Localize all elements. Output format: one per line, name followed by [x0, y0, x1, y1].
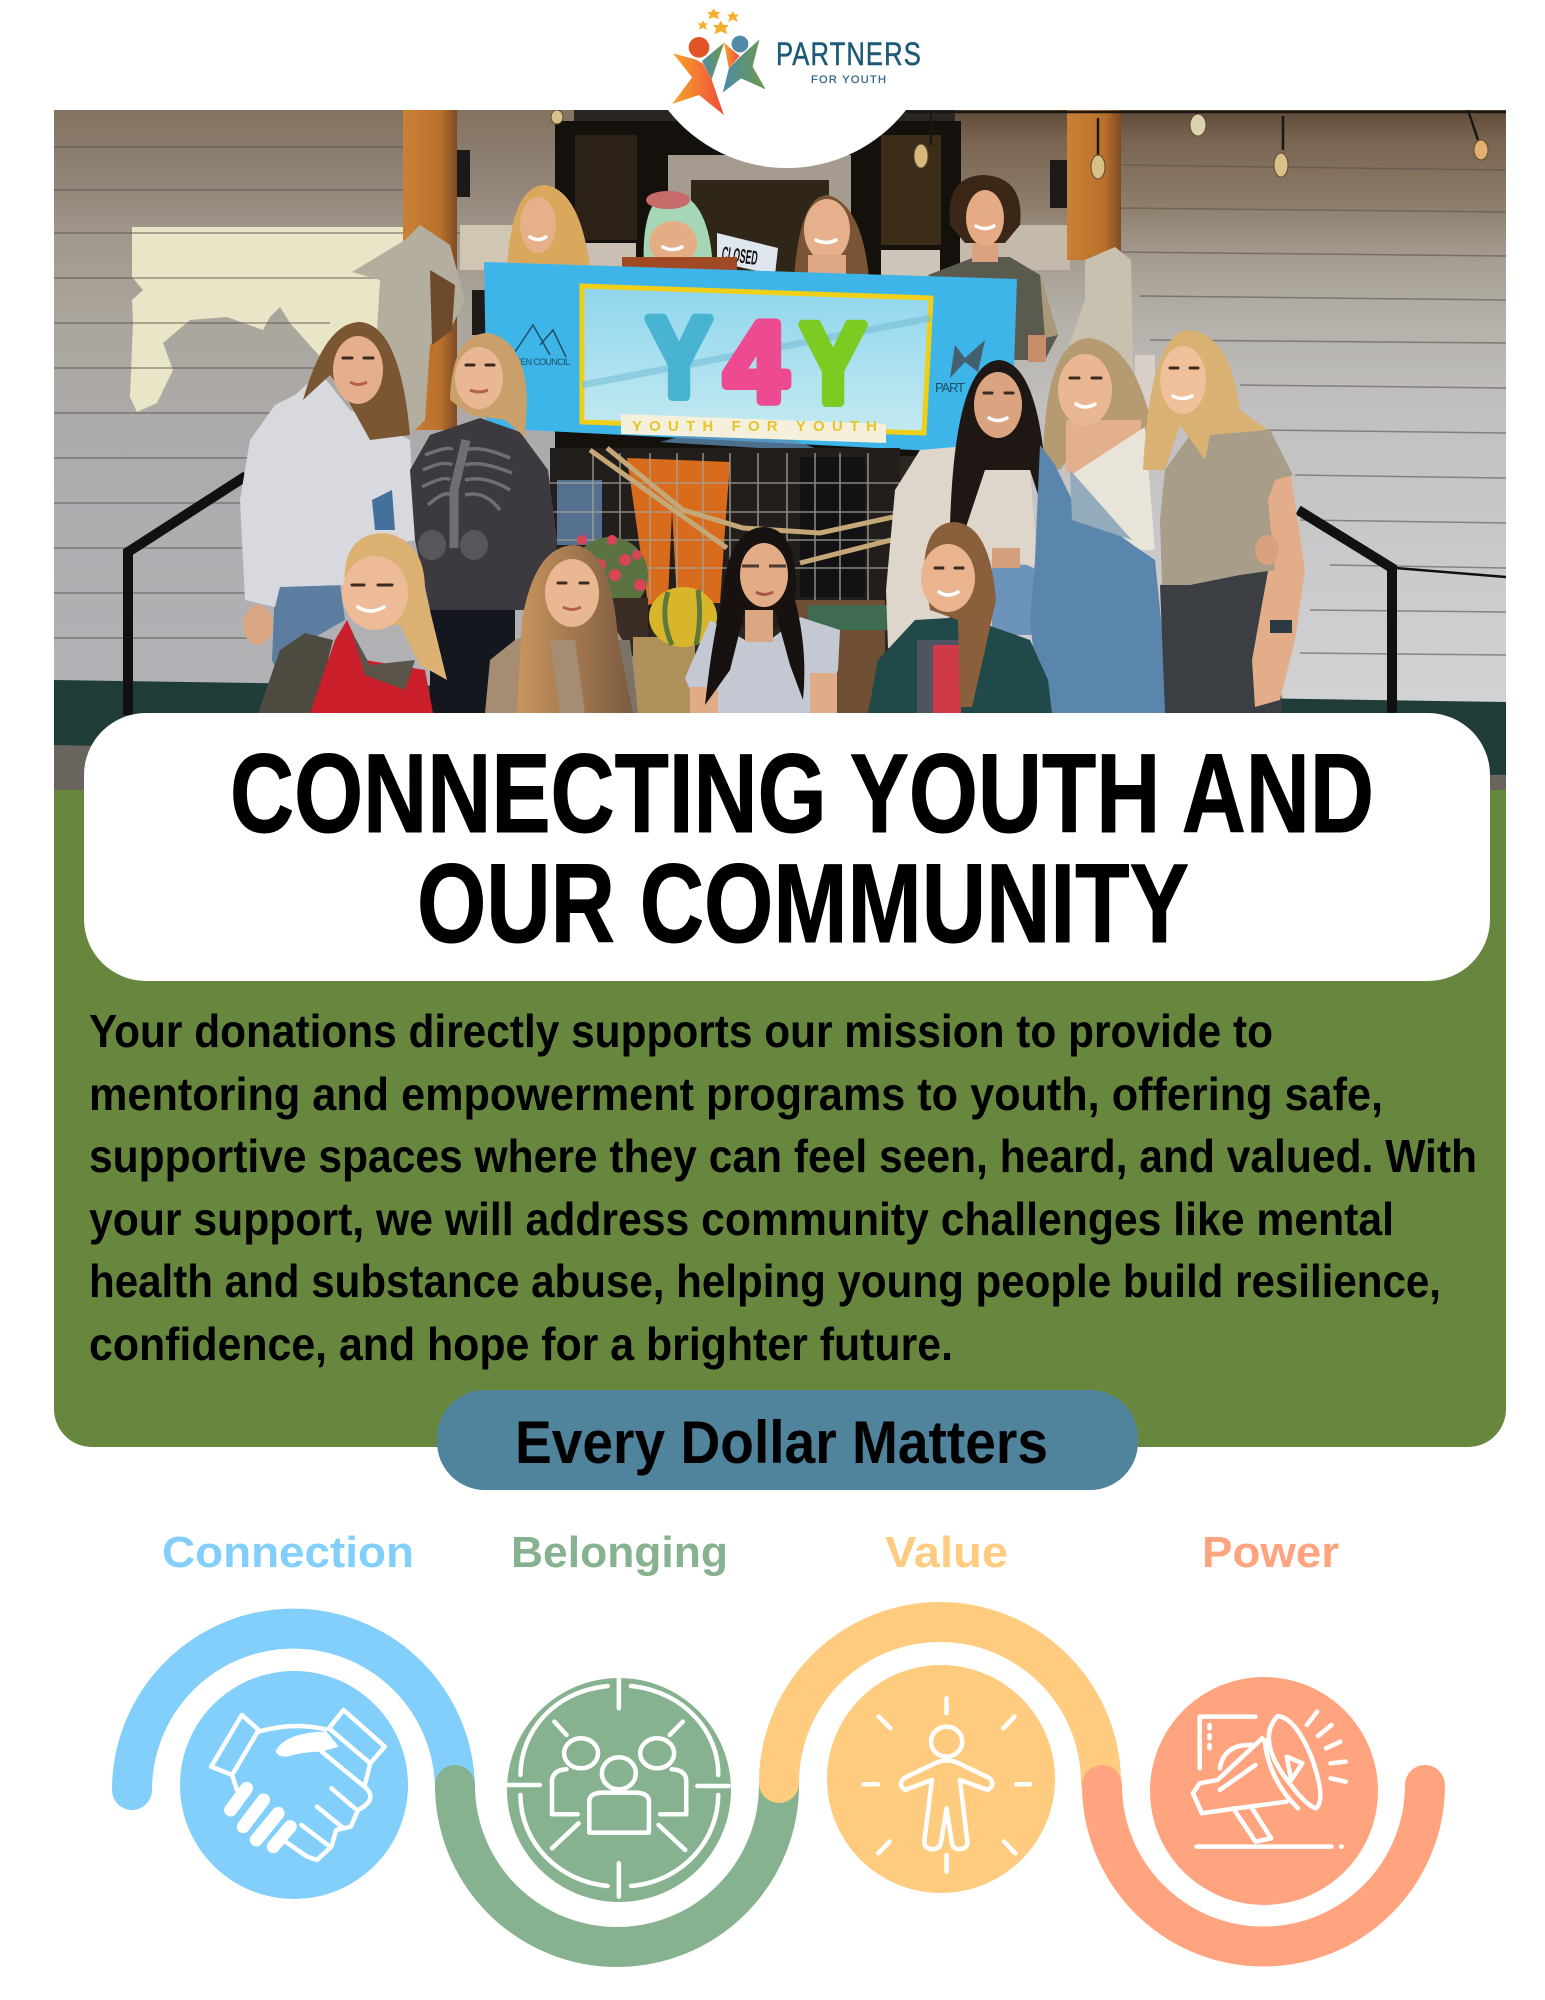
circle icon: belonging group — [507, 1677, 731, 1902]
person in skeleton sweatshirt — [410, 333, 557, 717]
banner logos: TEEN COUNCIL — [510, 357, 570, 367]
logo backdrop semicircle — [668, 110, 906, 168]
circle icon: power megaphone — [1150, 1677, 1378, 1905]
wall right — [955, 110, 1506, 720]
person in cream cardigan — [886, 360, 1048, 648]
lit wall by door — [460, 225, 513, 270]
wooden posts — [403, 110, 1121, 430]
closed sign: CLOSED — [720, 243, 759, 270]
string lights — [551, 110, 1506, 179]
banner logos — [510, 325, 985, 395]
front row: tan jacket — [485, 545, 638, 713]
front row: red vest — [258, 533, 447, 713]
circle icon: value person — [827, 1665, 1055, 1893]
logo: Partners for Youth — [672, 9, 921, 115]
wave arc: coral — [1102, 1785, 1425, 1946]
mission body text — [89, 1005, 1477, 1370]
sunlit wall patch — [130, 227, 405, 412]
logo mark: stars and figures — [672, 9, 766, 115]
front row: grey t-shirt — [685, 527, 840, 715]
mission body text: your support, we will address community challenges like mental — [89, 1193, 1394, 1245]
mission body text: health and substance abuse, helping young people build resilience, — [89, 1255, 1441, 1307]
door frame and glass — [555, 121, 961, 456]
person in tan shirt — [1143, 330, 1305, 713]
steps, fence and pumpkin — [550, 448, 900, 715]
foundation and pavement — [54, 680, 1506, 775]
railings — [128, 476, 1506, 715]
wave arc: blue — [132, 1629, 455, 1790]
label: Power: Power — [1202, 1528, 1339, 1577]
closed sign — [717, 233, 778, 275]
banner lettering Y4Y: 4 — [725, 300, 787, 425]
wave arc: orange — [779, 1622, 1101, 1783]
label: Connection: Connection — [162, 1528, 414, 1577]
circle icon: handshake — [180, 1671, 408, 1899]
person in white hoodie — [240, 322, 415, 692]
banner lettering Y4Y: Y — [801, 301, 865, 426]
title line 2: OUR COMMUNITY — [417, 841, 1189, 966]
siding lines — [54, 147, 1506, 655]
banner logos: PART — [935, 380, 965, 395]
front row: green jacket — [868, 522, 1052, 715]
mission body text: mentoring and empowerment programs to youth, offering safe, — [89, 1068, 1383, 1120]
logo wordmark: PARTNERS — [776, 37, 921, 73]
mission body text: confidence, and hope for a brighter future. — [89, 1318, 953, 1370]
banner lettering Y4Y: Y — [647, 295, 711, 420]
person in denim overalls — [1030, 338, 1165, 713]
pill: Every Dollar Matters — [437, 1390, 1138, 1490]
pill: Every Dollar Matters: Every Dollar Matters — [515, 1409, 1048, 1476]
green mission panel — [54, 790, 1506, 1447]
photo: youth group on porch steps with Y4Y banner — [54, 110, 1506, 790]
title card — [84, 713, 1490, 981]
photo base behind steps — [54, 110, 1506, 790]
logo tagline: FOR YOUTH — [811, 74, 886, 86]
mission body text: supportive spaces where they can feel seen, heard, and valued. With — [89, 1130, 1477, 1182]
banner — [484, 262, 1017, 455]
label: Belonging: Belonging — [511, 1528, 728, 1577]
wave arc: green — [455, 1785, 779, 1947]
banner tagline: YOUTH FOR YOUTH — [632, 418, 877, 435]
banner tagline — [621, 414, 886, 443]
mesh ribbons — [352, 225, 1155, 440]
label: Value: Value — [885, 1528, 1008, 1577]
back row people — [472, 175, 1058, 362]
mission body text: Your donations directly supports our mission to provide to — [89, 1005, 1273, 1057]
banner lettering Y4Y — [644, 314, 868, 407]
wall left — [54, 110, 574, 720]
